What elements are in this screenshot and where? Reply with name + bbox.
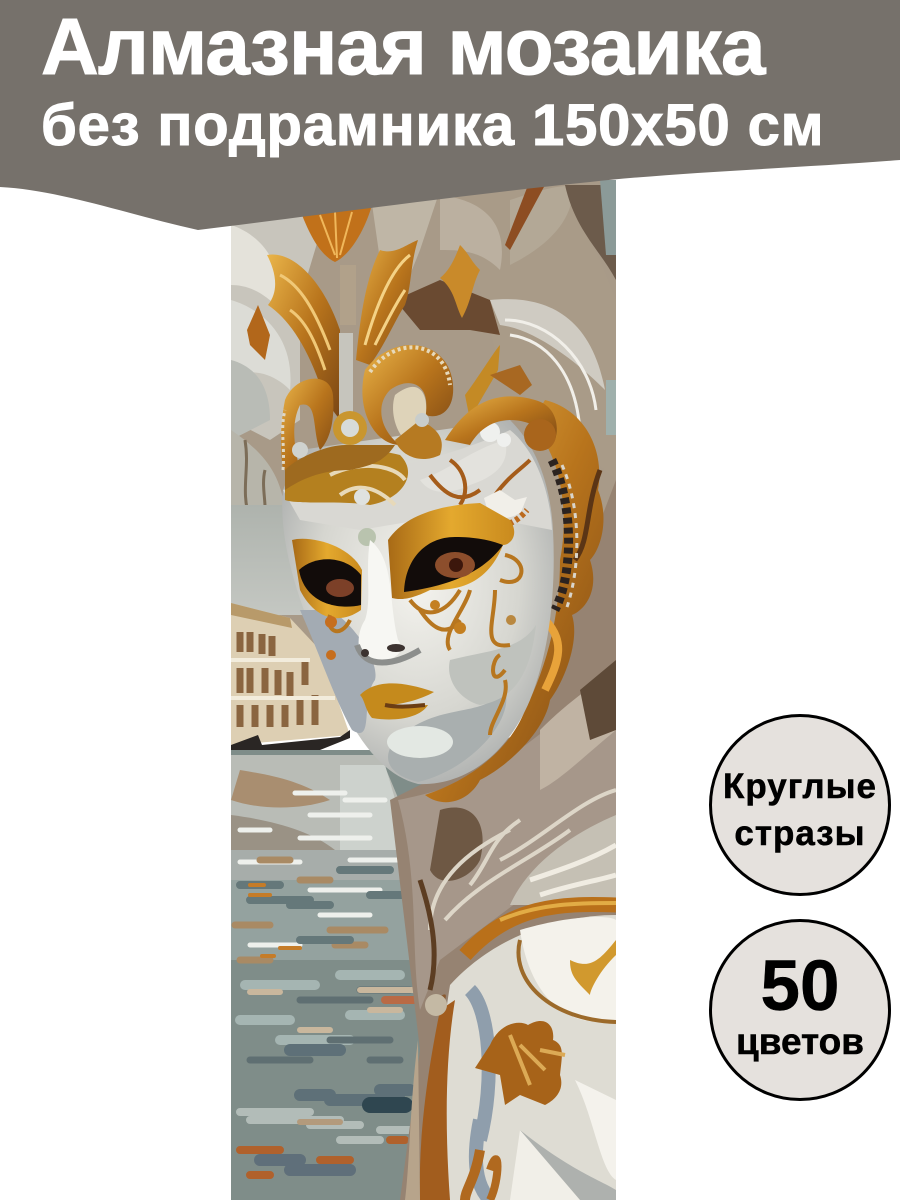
right plume: [356, 240, 418, 365]
header banner: [0, 0, 900, 230]
left plume: [267, 255, 340, 420]
painting: Venetian carnival mask: [231, 180, 616, 1200]
right gold trim: [425, 400, 603, 802]
colours label: цветов: [736, 1021, 864, 1062]
right scrolls: [395, 420, 442, 459]
lace collar: [510, 815, 616, 905]
left scrolls: [281, 379, 333, 470]
left small ornament: [247, 305, 270, 360]
left eye with gold surround: [292, 539, 362, 618]
buildings: [231, 603, 350, 745]
number of colours: 50: [760, 947, 839, 1026]
right eye with gold surround: [388, 503, 514, 599]
crown ornament: [247, 205, 557, 490]
nose: [359, 540, 401, 661]
water: [231, 750, 422, 1200]
gondolas: [231, 730, 350, 750]
mask face: [282, 420, 554, 784]
forehead ornaments: [283, 430, 552, 530]
badge: round rhinestones: [709, 714, 891, 896]
badge: round rhinestones: стразы: [734, 814, 866, 853]
title line 2: без подрамника 150х50 см: [41, 93, 824, 158]
brown trim: [420, 1000, 455, 1200]
painting background feathers: [231, 180, 616, 700]
badge: round rhinestones: Круглые: [723, 767, 877, 806]
gold band: [465, 905, 616, 955]
big central scroll: [362, 345, 453, 445]
fleur ornament: [440, 245, 480, 318]
title line 1: Алмазная мозаика: [41, 2, 765, 91]
fan shell: [302, 205, 372, 262]
cheek swirls: [329, 555, 521, 735]
white sleeve: [437, 915, 616, 1200]
title: [41, 2, 824, 158]
sky: [231, 505, 304, 615]
scarf and costume: [390, 480, 616, 1200]
badge: 50 colours: [709, 919, 891, 1101]
lips: [360, 683, 434, 719]
brooch: [475, 1021, 562, 1105]
mask shading: [300, 610, 376, 733]
jewels column: [340, 265, 356, 325]
